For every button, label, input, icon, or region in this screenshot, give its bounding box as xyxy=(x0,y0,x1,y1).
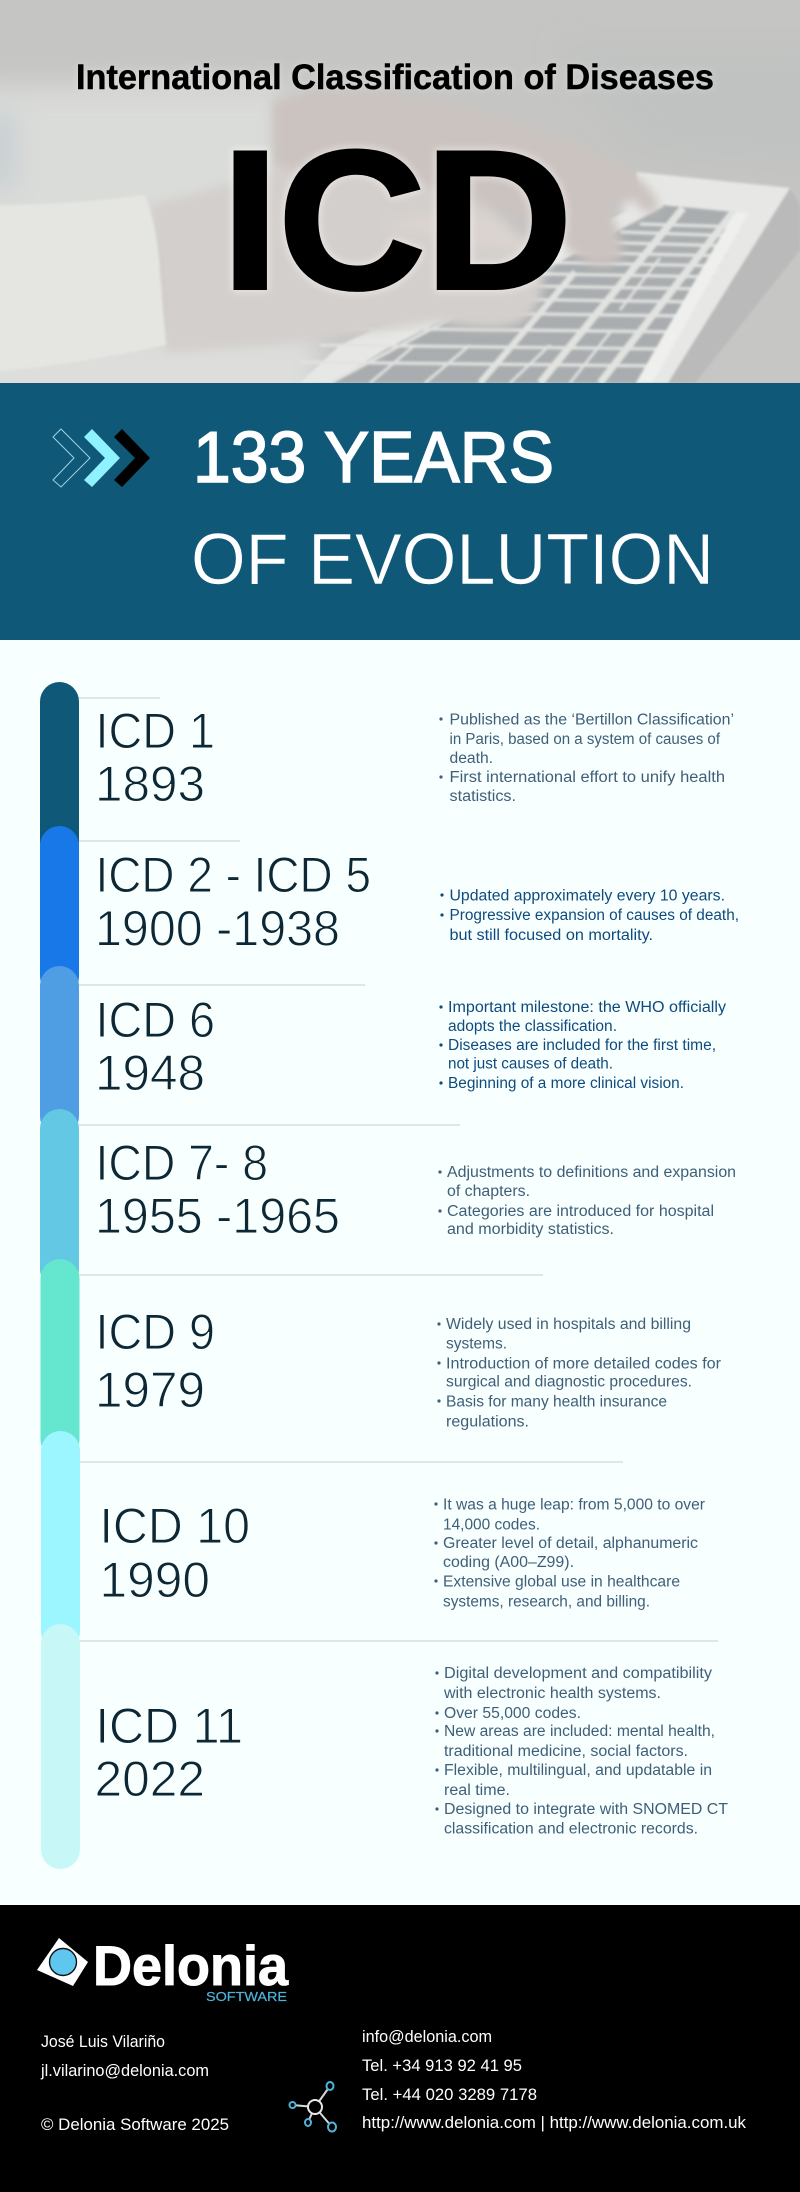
ICD large heading: ICD xyxy=(222,110,572,330)
text ICD 9: Widely used in hospitals and billing xyxy=(446,1316,691,1333)
text ICD 11: Digital development and compatibility xyxy=(444,1665,712,1682)
panel: ICD 11 xyxy=(94,1665,729,1838)
text ICD 10: Extensive global use in healthcare xyxy=(443,1574,680,1590)
text ICD 6: Important milestone: the WHO officially xyxy=(448,999,726,1016)
text ICD 9: Basis for many health insurance xyxy=(446,1394,667,1410)
text ICD 10: It was a huge leap: from 5,000 to over xyxy=(443,1496,705,1514)
text ICD 10: systems, research, and billing. xyxy=(443,1594,650,1610)
text ICD 10: coding (A00–Z99). xyxy=(443,1554,574,1571)
contact: company xyxy=(362,2027,746,2132)
panel: ICD 10 xyxy=(100,1496,705,1610)
text ICD 11: real time. xyxy=(444,1782,510,1799)
contact: company: Tel. +34 913 92 41 95 xyxy=(362,2056,522,2075)
text ICD 10: 14,000 codes. xyxy=(443,1516,540,1534)
text ICD 6: not just causes of death. xyxy=(448,1056,613,1072)
title glow: International Classification of Diseases xyxy=(76,58,714,97)
text ICD 9: Introduction of more detailed codes for xyxy=(446,1356,721,1372)
divider lines xyxy=(79,697,718,1642)
heading ICD 7-8: 1955 -1965 xyxy=(95,1188,340,1244)
panel: ICD 1 xyxy=(95,703,734,812)
heading ICD 6: ICD 6 xyxy=(96,992,215,1048)
heading ICD 10: 1990 xyxy=(100,1552,210,1608)
heading ICD 11 xyxy=(94,1698,243,1807)
contact: company: http://www.delonia.com | http://www.delonia.com.uk xyxy=(362,2113,746,2132)
text ICD 2-5: but still focused on mortality. xyxy=(450,927,653,944)
page background xyxy=(0,640,800,1905)
heading ICD 2-5 xyxy=(95,847,371,956)
ICD glow: ICD xyxy=(222,110,572,330)
heading ICD 1: ICD 1 xyxy=(96,703,215,759)
heading ICD 9 xyxy=(95,1304,215,1418)
heading ICD 7-8: ICD 7- 8 xyxy=(96,1135,268,1191)
text ICD 6: Diseases are included for the first time, xyxy=(448,1037,716,1054)
text ICD 7-8: and morbidity statistics. xyxy=(447,1221,614,1238)
heading ICD 10: ICD 10 xyxy=(100,1498,250,1554)
text ICD 9 xyxy=(437,1316,721,1430)
text ICD 11: with electronic health systems. xyxy=(443,1685,661,1702)
heading: 133 years: 133 YEARS xyxy=(193,418,554,498)
upper hand xyxy=(272,94,658,266)
logo: Delonia xyxy=(37,1934,289,2004)
contact: author: José Luis Vilariño xyxy=(41,2032,165,2051)
contact: company: Tel. +44 020 3289 7178 xyxy=(362,2085,537,2104)
heading ICD 1: 1893 xyxy=(95,756,205,812)
panel: ICD 7-8 xyxy=(95,1135,736,1244)
heading ICD 2-5: 1900 -1938 xyxy=(95,900,340,956)
text ICD 11 xyxy=(435,1665,729,1838)
hero banner with laptop photo xyxy=(0,0,800,420)
panel: ICD 6 xyxy=(95,992,726,1101)
text ICD 11: classification and electronic records. xyxy=(444,1820,698,1838)
heading ICD 6: 1948 xyxy=(95,1045,205,1101)
text ICD 10: Greater level of detail, alphanumeric xyxy=(443,1535,698,1552)
text ICD 9: surgical and diagnostic procedures. xyxy=(446,1374,692,1390)
text ICD 11: Designed to integrate with SNOMED CT xyxy=(444,1801,729,1818)
heading ICD 1 xyxy=(95,703,215,812)
title: International Classification of Diseases xyxy=(76,58,714,97)
icon: chevrons xyxy=(53,429,150,487)
heading ICD 10 xyxy=(100,1498,250,1608)
contact: company: info@delonia.com xyxy=(362,2027,492,2046)
text ICD 1: Published as the ‘Bertillon Classification’ xyxy=(450,712,734,728)
text ICD 9: regulations. xyxy=(446,1414,529,1430)
contact: author: © Delonia Software 2025 xyxy=(41,2115,229,2134)
heading ICD 9: 1979 xyxy=(95,1362,205,1418)
text ICD 7-8 xyxy=(438,1164,736,1238)
text ICD 10 xyxy=(434,1496,705,1610)
logo: Delonia: SOFTWARE xyxy=(206,1989,287,2004)
panel: footer xyxy=(0,1905,800,2192)
lower hand xyxy=(154,174,546,350)
text ICD 7-8: Adjustments to definitions and expansion xyxy=(447,1164,736,1181)
text ICD 1 xyxy=(439,712,734,805)
text ICD 11: traditional medicine, social factors. xyxy=(444,1743,688,1760)
heading ICD 7-8 xyxy=(95,1135,340,1244)
text ICD 6 xyxy=(439,999,726,1092)
contact: author: jl.vilarino@delonia.com xyxy=(40,2061,209,2080)
heading ICD 6 xyxy=(95,992,215,1101)
text ICD 2-5: Progressive expansion of causes of death, xyxy=(450,907,739,924)
text ICD 9: systems. xyxy=(446,1336,507,1352)
panel: evolution band xyxy=(0,383,800,640)
panel: ICD 9 xyxy=(95,1304,721,1430)
heading ICD 2-5: ICD 2 - ICD 5 xyxy=(96,847,371,903)
heading ICD 9: ICD 9 xyxy=(96,1304,215,1360)
text ICD 1: statistics. xyxy=(450,788,516,805)
text ICD 11: Flexible, multilingual, and updatable in xyxy=(444,1762,712,1779)
text ICD 1: death. xyxy=(450,750,493,767)
text ICD 6: Beginning of a more clinical vision. xyxy=(448,1075,684,1092)
contact: author xyxy=(40,2032,229,2134)
timeline bar xyxy=(40,682,80,1869)
text ICD 1: First international effort to unify health xyxy=(450,769,725,786)
text ICD 11: Over 55,000 codes. xyxy=(444,1705,581,1722)
text ICD 7-8: Categories are introduced for hospital xyxy=(447,1203,714,1220)
panel: ICD 2-5 xyxy=(95,847,739,956)
text ICD 2-5: Updated approximately every 10 years. xyxy=(450,888,725,904)
heading ICD 11: 2022 xyxy=(94,1751,205,1807)
text ICD 7-8: of chapters. xyxy=(447,1183,530,1200)
text ICD 2-5 xyxy=(440,888,739,944)
text ICD 1: in Paris, based on a system of causes of xyxy=(450,731,721,748)
heading: of evolution: OF EVOLUTION xyxy=(191,520,714,600)
heading ICD 11: ICD 11 xyxy=(96,1698,243,1754)
text ICD 11: New areas are included: mental health, xyxy=(444,1723,715,1740)
icon: network xyxy=(290,2082,336,2132)
logo: Delonia: Delonia xyxy=(93,1934,289,1997)
text ICD 6: adopts the classification. xyxy=(448,1018,617,1035)
